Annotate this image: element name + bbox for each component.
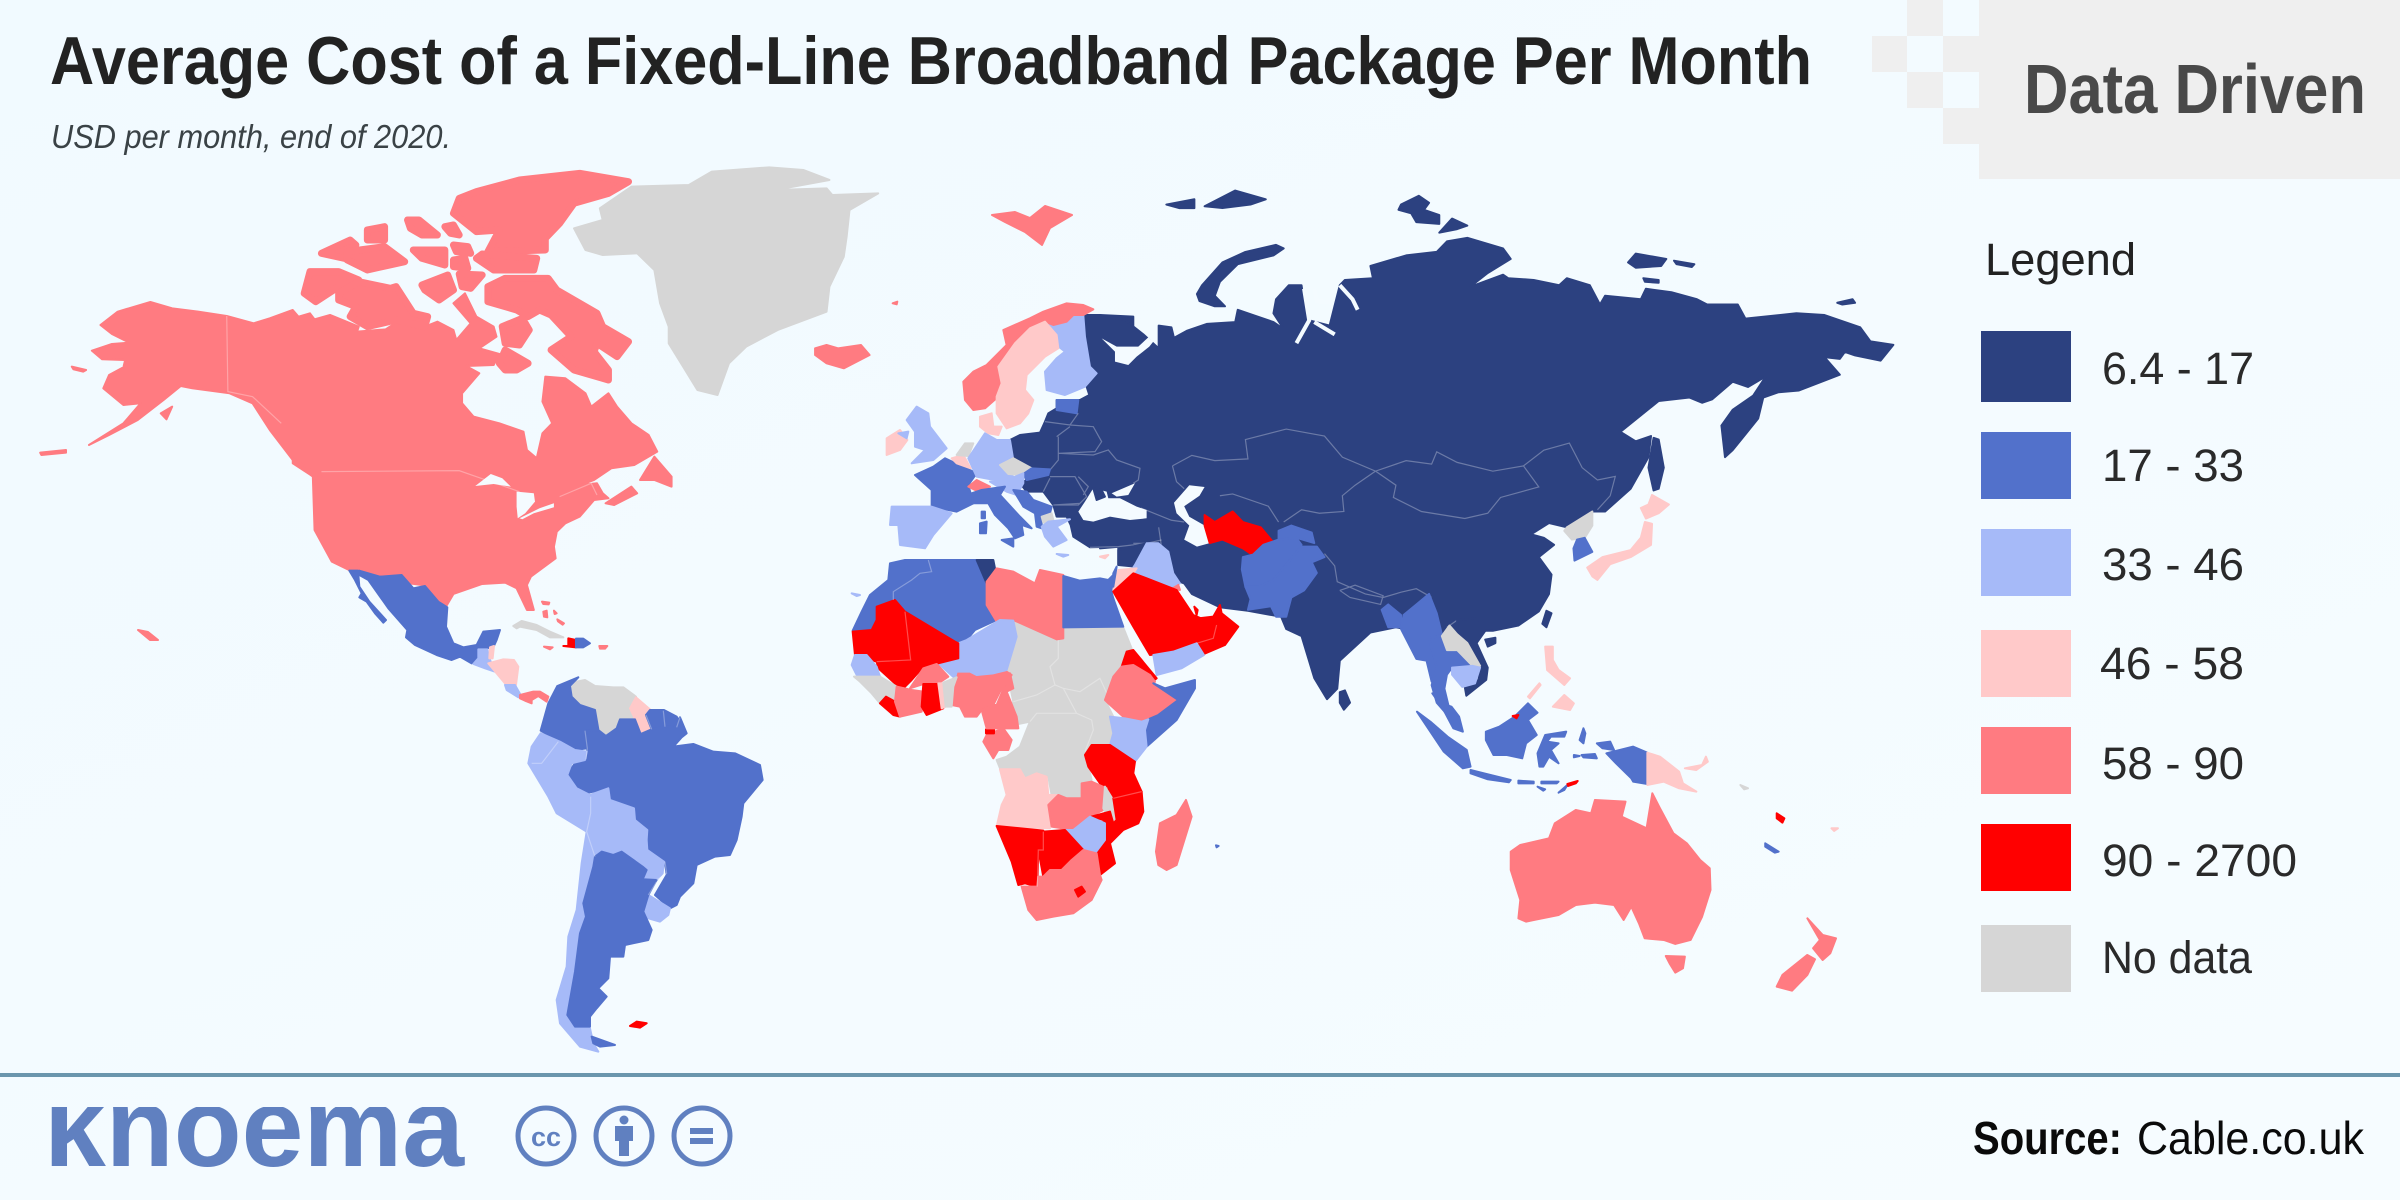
Greece [1042, 519, 1070, 547]
Ireland [887, 430, 907, 455]
Venezuela [570, 680, 636, 736]
United Kingdom [907, 407, 947, 463]
Chile [557, 832, 598, 1052]
Canada, USA and Alaska [89, 293, 657, 610]
Zambia [1048, 782, 1107, 830]
Malay Peninsula [1432, 693, 1463, 732]
icon: creative commons [518, 1108, 574, 1164]
Tasmania [1666, 956, 1685, 973]
Argentina [567, 852, 657, 1027]
Sakhalin [1648, 438, 1664, 490]
Ethiopia [1105, 665, 1178, 722]
subtitle: USD per month, end of 2020. [51, 118, 451, 155]
legend item: 17 - 33 [1981, 432, 2244, 499]
Namibia [997, 826, 1043, 887]
Syria [1118, 543, 1147, 567]
Mexico [359, 571, 500, 663]
central Africa, no data [997, 621, 1132, 798]
map region: Mexico, Central America and Caribbean [349, 571, 590, 703]
Nigeria [952, 672, 1012, 717]
Burkina Faso [910, 664, 948, 688]
Benin [943, 677, 957, 707]
map region: Hawaii [138, 630, 158, 640]
Botswana [1038, 830, 1083, 877]
Norway [963, 303, 1093, 410]
Estonia [1057, 400, 1078, 413]
West New Guinea [1606, 747, 1647, 784]
legend item: 33 - 46 [1981, 529, 2244, 596]
Iceland [815, 345, 870, 368]
European Russia and eastern Europe [1010, 315, 1133, 565]
Ivory Coast [895, 687, 923, 717]
brand tab: Data Driven [1872, 0, 2400, 179]
New Zealand [1807, 918, 1836, 960]
Czechia [1000, 458, 1032, 475]
legend item: 46 - 58 [1981, 630, 2244, 697]
Australia [1511, 793, 1711, 944]
Caspian Sea [1174, 485, 1210, 547]
legend item: 58 - 90 [1981, 727, 2244, 794]
map region: Svalbard [992, 206, 1072, 245]
Algeria [893, 560, 997, 642]
Cambodia [1452, 666, 1480, 687]
Iraq [1128, 543, 1180, 588]
Greenland [574, 167, 878, 395]
Germany [968, 433, 1013, 482]
legend item: 90 - 2700 [1981, 824, 2297, 891]
legend item: 33 - 46: 33 - 46 [2102, 539, 2244, 590]
Yemen [1153, 643, 1204, 675]
South Africa [1022, 850, 1102, 920]
Laos [1442, 626, 1480, 666]
world map [40, 167, 1893, 1052]
South Korea [1573, 538, 1592, 561]
Belgium [952, 455, 971, 468]
Haiti [563, 638, 576, 647]
Oman and UAE [1197, 605, 1238, 655]
Borneo [1486, 703, 1538, 758]
Senegal [852, 655, 880, 677]
Brazil [567, 717, 763, 908]
Arctic Archipelago [304, 173, 629, 380]
icon: attribution [596, 1108, 652, 1164]
Guatemala and neighbours [473, 649, 495, 672]
map region: South America [528, 646, 763, 1052]
Switzerland [968, 480, 990, 492]
Niger [938, 620, 1017, 678]
legend [1981, 234, 2297, 992]
Saudi Arabia [1113, 573, 1217, 655]
Guyana [630, 697, 652, 734]
title: Average Cost of a Fixed-Line Broadband Package Per Month [50, 23, 1812, 99]
Timor-Leste [1567, 781, 1578, 786]
Russia, Central Asia, China and India [1100, 238, 1893, 699]
legend item: 17 - 33: 17 - 33 [2102, 440, 2244, 491]
Balkans [1013, 490, 1052, 528]
legend heading: Legend [1985, 234, 2136, 285]
Sweden [997, 322, 1058, 428]
Myanmar [1401, 594, 1442, 682]
Angola [997, 769, 1058, 828]
Denmark [980, 413, 1002, 435]
legend item: 58 - 90: 58 - 90 [2102, 738, 2244, 789]
Mali and Mauritania [853, 600, 958, 687]
Egypt [1063, 576, 1123, 627]
Novaya Zemlya [1197, 245, 1284, 306]
Paraguay [623, 837, 664, 880]
icon: no derivatives [674, 1108, 730, 1164]
Japan [1641, 495, 1669, 519]
Falkland Islands [630, 1022, 647, 1028]
legend item: 90 - 2700: 90 - 2700 [2102, 835, 2297, 886]
Italy [972, 487, 1032, 538]
logo: knoema: knoema [44, 1065, 465, 1190]
Finland [1045, 315, 1097, 395]
Libya [987, 568, 1063, 639]
Black Sea, Sea of Azov and White Sea [1078, 337, 1153, 522]
map region: Africa and Arabia [852, 560, 1238, 920]
Zimbabwe [1065, 817, 1105, 853]
borders: Africa and Arabia [893, 560, 1217, 887]
map region: Southeast Asia and Oceania [1417, 647, 1838, 991]
legend item: 6.4 - 17 [1981, 331, 2254, 402]
map region: Europe and Middle East [887, 302, 1180, 590]
Austria and Slovenia [990, 473, 1023, 495]
Tanzania [1085, 745, 1142, 798]
Cuba [513, 621, 563, 637]
Gabon [983, 728, 1012, 758]
Ghana [922, 684, 943, 715]
Netherlands [957, 443, 973, 456]
Arctic islands [1398, 196, 1439, 224]
Morocco [853, 560, 932, 631]
Pakistan [1245, 547, 1324, 617]
Suriname and French Guiana [646, 710, 686, 733]
Papua New Guinea [1647, 753, 1696, 792]
borders: central Africa [1013, 639, 1108, 752]
France [915, 458, 977, 512]
source credit [1973, 1112, 2365, 1164]
Tunisia [977, 560, 995, 583]
Jordan [1113, 568, 1137, 590]
Colombia [541, 677, 598, 750]
Kenya [1110, 717, 1148, 762]
legend item: No data: No data [2102, 932, 2253, 983]
borders: South America [532, 711, 680, 895]
icon: creative commons: cc [531, 1122, 561, 1152]
Jan Mayen [893, 302, 897, 304]
legend item: No data [1981, 925, 2253, 992]
Guinea region [854, 677, 898, 703]
Ecuador and Peru [528, 733, 591, 832]
Philippines [1545, 647, 1570, 685]
Sri Lanka [1340, 690, 1350, 710]
Madagascar [1156, 800, 1192, 870]
borders: Kazakhstan, Mongolia, China [1141, 429, 1615, 627]
Liberia [880, 697, 900, 717]
Turkmenistan [1205, 512, 1272, 555]
map region: Eurasian landmass [1010, 191, 1893, 720]
Panama [520, 692, 548, 703]
legend item: 6.4 - 17: 6.4 - 17 [2102, 343, 2254, 394]
Sumatra [1417, 712, 1471, 768]
Cameroon [982, 673, 1018, 728]
Thailand [1429, 636, 1472, 720]
Afghanistan [1242, 538, 1302, 587]
source credit: Cable.co.uk [2137, 1112, 2365, 1164]
Malawi [1103, 787, 1117, 823]
Slovakia [1023, 468, 1050, 480]
Bangladesh [1382, 604, 1401, 627]
Somalia [1145, 680, 1195, 747]
borders: eastern Europe [1043, 413, 1162, 547]
Togo [938, 683, 946, 708]
New Caledonia [1765, 843, 1779, 853]
Bolivia [587, 788, 647, 857]
legend item: 46 - 58: 46 - 58 [2100, 638, 2244, 689]
Vietnam [1457, 619, 1488, 696]
border: Canada and USA [227, 316, 597, 497]
map region: North America [40, 167, 878, 610]
Eritrea [1122, 650, 1157, 683]
Asia detail [1141, 191, 1855, 720]
source credit: Source: [1973, 1112, 2122, 1164]
Lesotho [1075, 887, 1085, 897]
footer rule [0, 1073, 2400, 1077]
Uruguay [643, 895, 670, 922]
Java [1471, 770, 1511, 782]
Mozambique [1092, 792, 1143, 875]
Spain and Portugal [890, 507, 952, 548]
Sulawesi [1538, 732, 1566, 767]
North Korea [1564, 512, 1592, 540]
